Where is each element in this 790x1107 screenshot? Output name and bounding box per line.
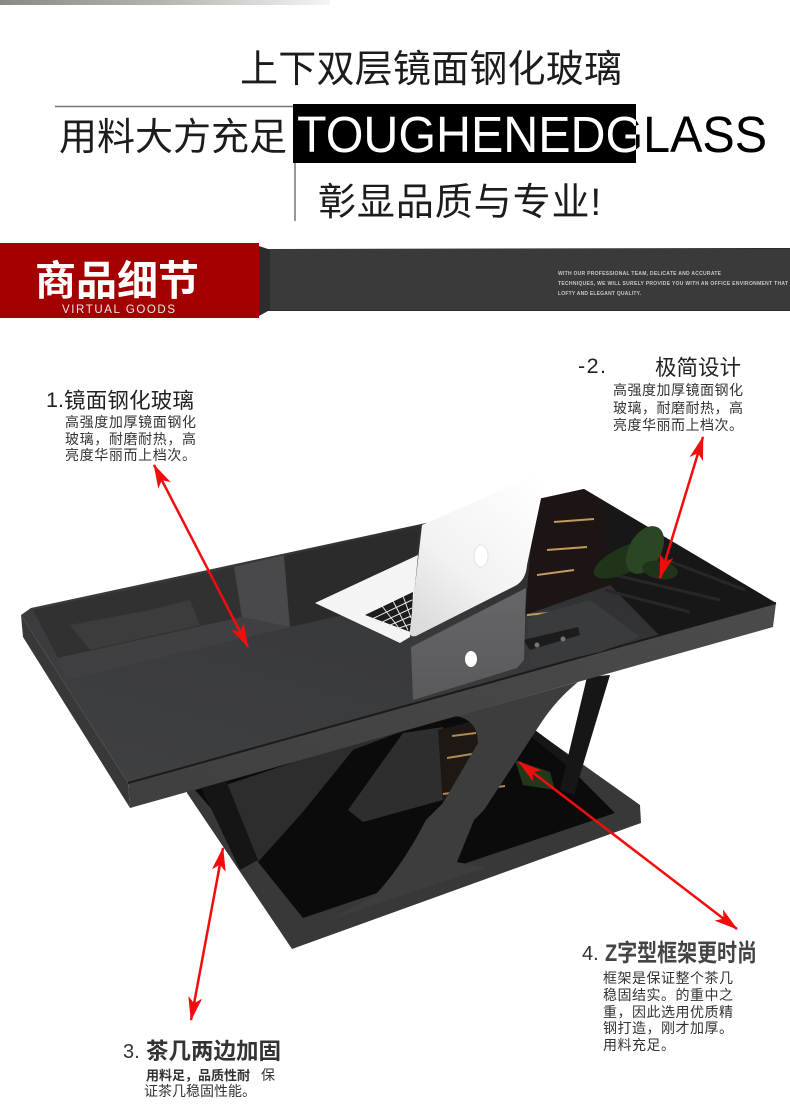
callout 3 number: 3. (123, 1041, 140, 1063)
arrow: reinforced sides (191, 848, 223, 1020)
title line 2: 用料大方充足 (59, 117, 287, 159)
green reflection (515, 760, 555, 790)
callout 4 body: 钢打造，刚才加厚。 (603, 1020, 733, 1036)
laptop screen (410, 470, 547, 636)
reflected apple logo (465, 651, 477, 667)
laptop keyboard (365, 592, 413, 632)
callout 4 heading: Z字型框架更时尚 (605, 939, 757, 966)
callout 1 heading: 镜面钢化玻璃 (64, 389, 194, 413)
reflected window (33, 567, 242, 658)
banner subheading: VIRTUAL GOODS (62, 304, 175, 316)
callout 2 body: 玻璃，耐磨耐热，高 (613, 400, 743, 416)
coffee table illustration (21, 470, 776, 949)
laptop apple logo (474, 545, 488, 567)
english title: TOUGHENEDGLASS (297, 106, 767, 163)
callout 4 number: 4. (582, 943, 599, 965)
rear legs (560, 675, 610, 795)
arrow: Z frame (519, 762, 737, 929)
callout 4 body: 重，因此选用优质精 (603, 1004, 733, 1020)
table top glass (21, 489, 776, 783)
decorative strip at top edge (0, 0, 330, 5)
callout 3: 证茶几稳固性能。 (144, 1083, 256, 1099)
reflected dark right side (525, 489, 776, 636)
callout 3: 保 (261, 1067, 275, 1083)
reflected furniture (527, 600, 640, 668)
callout 4 body: 用料充足。 (603, 1037, 675, 1053)
bookshelf reflection under table (438, 720, 478, 805)
banner heading: 商品细节 (35, 258, 199, 304)
callout 1 body: 亮度华丽而上档次。 (65, 447, 196, 463)
lower shelf glass (195, 716, 615, 918)
arrow: glass top (154, 465, 248, 647)
callout 4 body: 框架是保证整个茶几 (603, 970, 733, 986)
left leg (200, 778, 258, 870)
callout 3 (123, 1039, 281, 1099)
callout 2 heading: 极简设计 (655, 356, 741, 380)
callout 2 number: -2. (578, 354, 606, 378)
callout 1 body: 高强度加厚镜面钢化 (65, 414, 196, 430)
section banner (0, 243, 790, 318)
title line 1: 上下双层镜面钢化玻璃 (240, 49, 622, 91)
callout 1 (46, 388, 196, 463)
shelf reflection shape (348, 727, 443, 822)
reflected plant (589, 519, 679, 586)
black highlight box (293, 104, 636, 163)
table front edge (128, 603, 776, 808)
banner red label (0, 243, 259, 318)
table left edge (21, 615, 130, 808)
callout 4 body: 稳固结实。的重中之 (603, 987, 733, 1003)
shelf reflection wall (205, 733, 398, 862)
banner fine print: WITH OUR PROFESSIONAL TEAM, DELICATE AND ACCURATE (558, 271, 722, 277)
callout 4 (582, 939, 757, 1053)
title line 3: 彰显品质与专业! (318, 182, 601, 224)
laptop base (315, 555, 418, 643)
callout 2 (578, 354, 743, 433)
callout 3 body: 用料足，品质性耐 (146, 1068, 250, 1083)
callout 3 heading: 茶几两边加固 (146, 1039, 281, 1064)
callout 2 body: 亮度华丽而上档次。 (613, 417, 743, 433)
callout 2 body: 高强度加厚镜面钢化 (613, 382, 743, 398)
Z frame (329, 682, 578, 920)
section banner: TECHNIQUES, WE WILL SURELY PROVIDE YOU WITH AN OFFICE ENVIRONMENT THAT (558, 281, 788, 287)
banner dark strip (259, 246, 790, 316)
section banner: LOFTY AND ELEGANT QUALITY. (558, 291, 642, 297)
callout 1 body: 玻璃，耐磨耐热，高 (65, 431, 196, 447)
laptop reflection (411, 588, 526, 700)
rule lines (55, 106, 295, 221)
reflected bookshelf (525, 489, 610, 615)
arrow: minimalist design (660, 437, 703, 578)
callout 1 number: 1. (46, 388, 64, 412)
title block (55, 49, 767, 224)
lower shelf rim (187, 716, 641, 949)
